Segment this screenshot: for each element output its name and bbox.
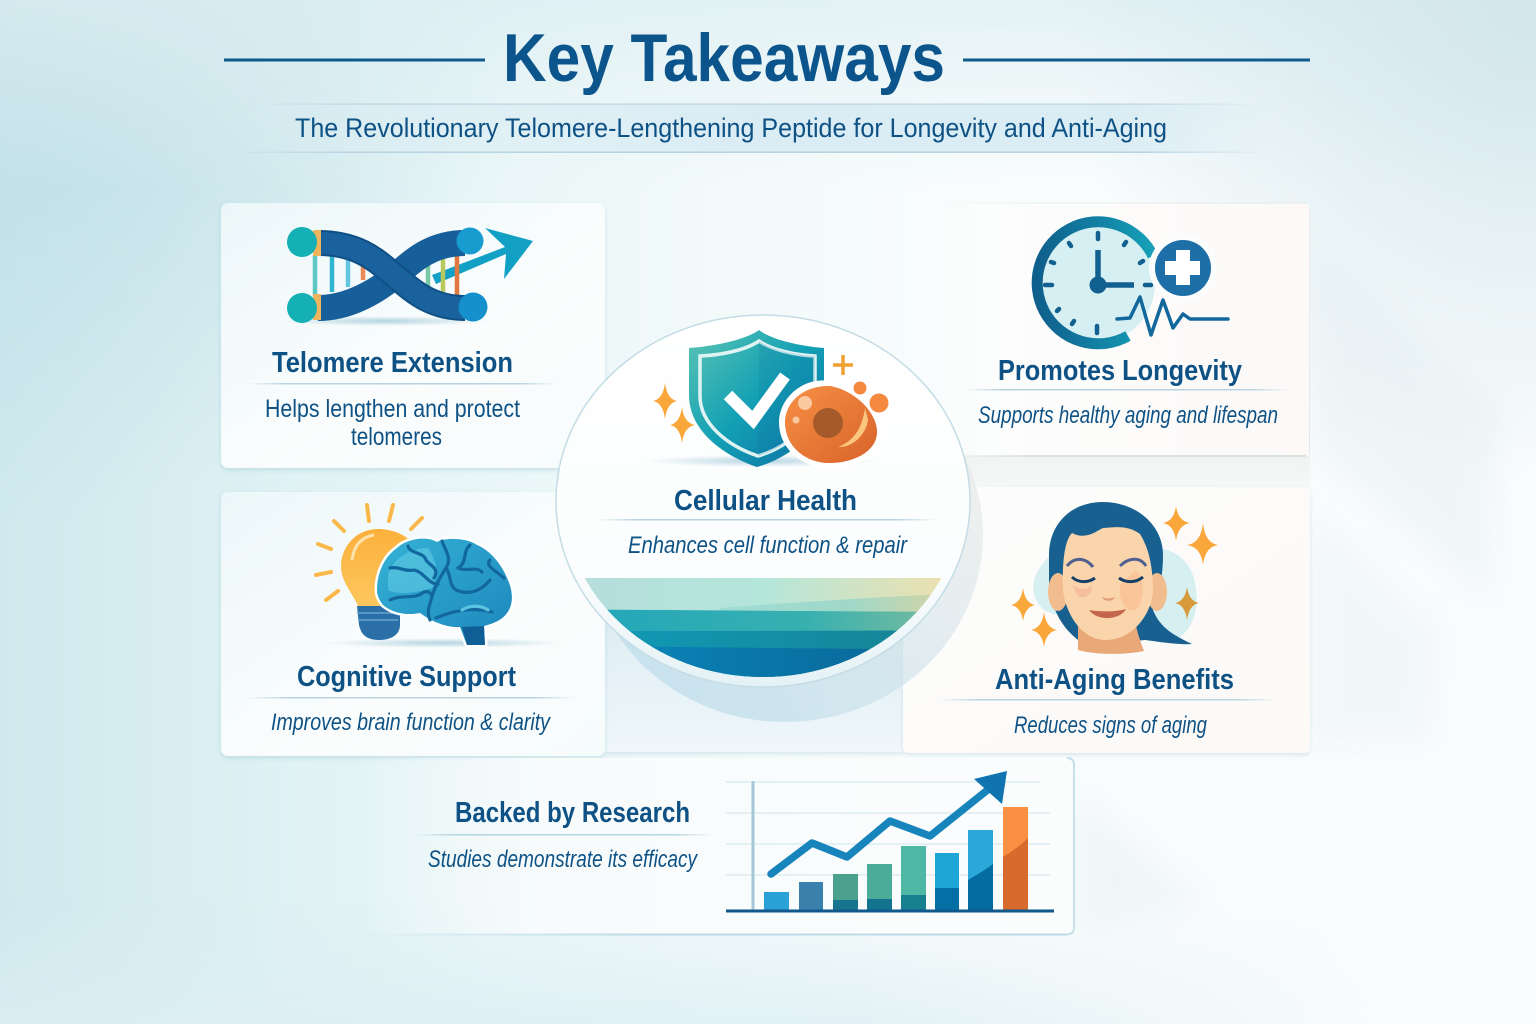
chart: rising bars and arrow (726, 771, 1054, 911)
text: anti-aging description: Reduces signs of aging (1014, 712, 1207, 739)
text: cellular description: Enhances cell function & repair (628, 532, 908, 559)
icon: clock with plus and heartbeat (1037, 222, 1228, 344)
heading: anti-aging benefits: Anti-Aging Benefits (995, 664, 1234, 696)
panel: cellular health circle (550, 315, 983, 722)
subtitle: The Revolutionary Telomere-Lengthening Peptide for Longevity and Anti-Aging (295, 113, 1167, 143)
panel: anti-aging benefits (903, 487, 1310, 753)
text: telomere description: telomeres (351, 423, 442, 451)
heading: promotes longevity: Promotes Longevity (998, 355, 1242, 387)
icon: shield with check and cell (645, 330, 888, 467)
subtitle (220, 104, 1270, 153)
text: cognitive description: Improves brain function & clarity (271, 709, 552, 736)
icon: serene face with sparkles (1011, 502, 1218, 654)
heading: telomere extension: Telomere Extension (272, 347, 513, 379)
panel: center backing (605, 600, 903, 752)
icon: DNA telomere with arrow (280, 227, 533, 326)
text: telomere description (265, 395, 520, 451)
heading: cellular health: Cellular Health (674, 485, 857, 517)
panel: promotes longevity (900, 202, 1310, 487)
heading: cognitive support: Cognitive Support (297, 661, 516, 693)
heading: backed by research: Backed by Research (455, 797, 690, 829)
text: telomere description: Helps lengthen and protect (265, 395, 520, 423)
icon: light bulb and brain (316, 505, 565, 648)
text: longevity description: Supports healthy aging and lifespan (978, 402, 1278, 429)
panel: backed by research (360, 758, 1074, 936)
panel: telomere extension (221, 203, 605, 468)
panel: cognitive support (221, 492, 605, 756)
text: research description: Studies demonstrate its efficacy (428, 846, 699, 873)
title: Key Takeaways (503, 20, 945, 96)
waves (584, 578, 942, 677)
